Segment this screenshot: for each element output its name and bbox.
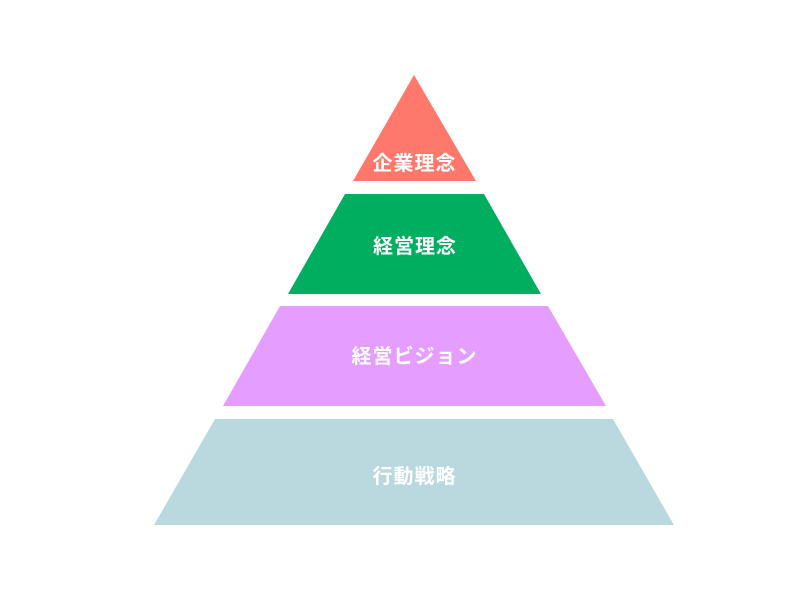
tier 2: management philosophy: [288, 194, 541, 294]
tier 3: management vision: [223, 306, 606, 406]
tier 1: corporate philosophy: 企業理念: [372, 152, 456, 175]
tier 4: action strategy: 行動戦略: [372, 464, 456, 488]
tier 2: management philosophy: 経営理念: [373, 235, 457, 258]
tier 3: management vision: 経営ビジョン: [352, 345, 478, 368]
tier 1: corporate philosophy: [353, 75, 476, 181]
tier 4: action strategy: [154, 419, 674, 525]
